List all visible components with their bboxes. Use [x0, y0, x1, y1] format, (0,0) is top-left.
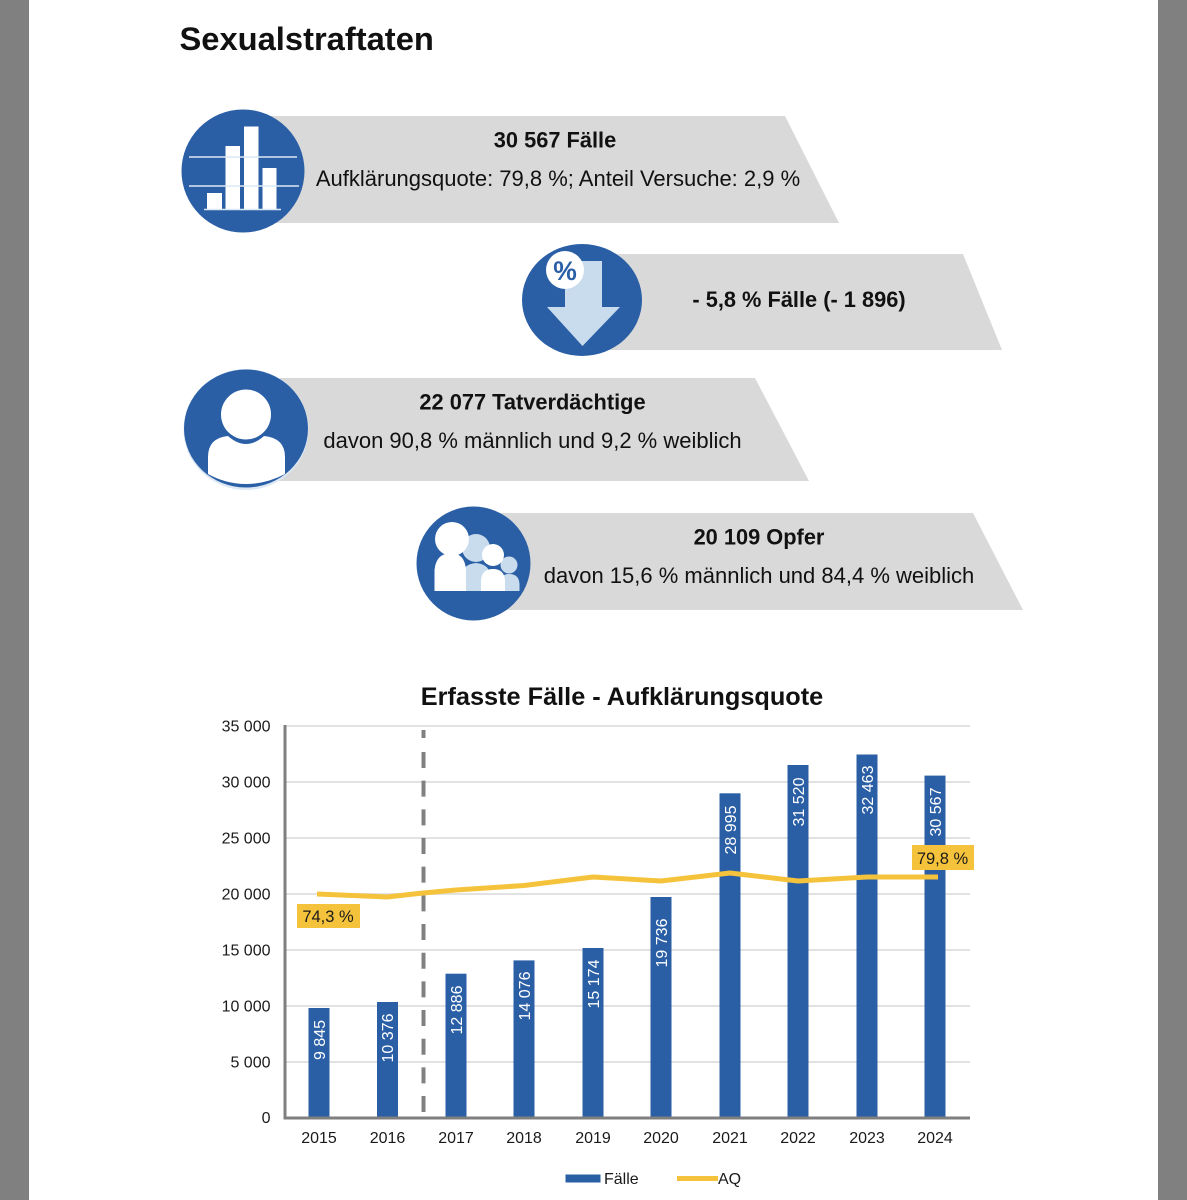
y axis labels	[222, 718, 271, 1127]
legend: AQ	[718, 1171, 741, 1188]
change text: - 5,8 % Fälle (- 1 896)	[692, 287, 906, 312]
x axis labels: 2023	[849, 1130, 885, 1147]
x axis labels	[301, 1130, 953, 1147]
x axis labels: 2018	[506, 1130, 542, 1147]
bar value labels: 15 174	[586, 959, 603, 1008]
label: 79,8 %	[912, 845, 974, 870]
x axis labels: 2020	[643, 1130, 679, 1147]
bar value labels: 32 463	[860, 765, 877, 814]
dashed separator	[422, 730, 426, 1112]
victims count: 20 109 Opfer	[694, 524, 825, 550]
bar value labels: 30 567	[928, 787, 945, 836]
panel: cases	[182, 110, 839, 232]
y axis labels: 10 000	[222, 998, 271, 1016]
x axis labels: 2021	[712, 1130, 748, 1147]
clearance rate line	[317, 873, 938, 897]
bar value labels: 28 995	[723, 805, 740, 854]
panel: victims	[416, 506, 1023, 620]
icon: group of people	[416, 506, 530, 620]
icon: bar chart	[182, 110, 304, 232]
y axis labels: 15 000	[222, 942, 271, 960]
x axis labels: 2024	[917, 1130, 953, 1147]
y axis labels: 5 000	[230, 1054, 271, 1072]
case count: 30 567 Fälle	[494, 128, 616, 152]
left page margin	[0, 0, 29, 1200]
chart title: Erfasste Fälle - Aufklärungsquote	[421, 683, 823, 711]
bar value labels: 12 886	[449, 985, 466, 1034]
y axis labels: 25 000	[222, 830, 271, 848]
x axis labels: 2022	[780, 1130, 816, 1147]
suspects count: 22 077 Tatverdächtige	[419, 390, 646, 414]
bars	[308, 754, 946, 1118]
clearance rate text: Aufklärungsquote: 79,8 %; Anteil Versuche: 2,9 %	[316, 166, 800, 191]
y axis labels: 30 000	[222, 774, 271, 792]
icon: person	[184, 369, 308, 490]
bar value labels: 9 845	[312, 1020, 329, 1060]
x axis labels: 2017	[438, 1130, 474, 1147]
axes	[285, 725, 970, 1118]
panel: suspects	[184, 369, 809, 490]
icon: percent down arrow: %	[553, 256, 577, 286]
label: 79,8 %: 79,8 %	[917, 850, 969, 868]
icon: percent down arrow	[522, 244, 642, 356]
y axis labels: 35 000	[222, 718, 271, 736]
bar value labels: 14 076	[517, 971, 534, 1020]
chart: cases and clearance rate	[222, 718, 974, 1147]
x axis labels: 2019	[575, 1130, 611, 1147]
label: 74,3 %: 74,3 %	[302, 908, 354, 926]
label: 74,3 %	[297, 904, 360, 928]
bar value labels: 10 376	[380, 1013, 397, 1062]
suspects gender text: davon 90,8 % männlich und 9,2 % weiblich	[323, 428, 742, 453]
legend	[566, 1171, 741, 1188]
y axis labels: 20 000	[222, 886, 271, 904]
bar value labels: 31 520	[791, 777, 808, 826]
bar value labels	[312, 765, 945, 1062]
x axis labels: 2015	[301, 1130, 337, 1147]
title: Sexualstraftaten	[180, 20, 434, 57]
right page margin	[1158, 0, 1187, 1200]
victims gender text: davon 15,6 % männlich und 84,4 % weiblich	[544, 563, 974, 588]
y axis labels: 0	[262, 1110, 271, 1127]
legend: Fälle	[604, 1171, 639, 1188]
bar value labels: 19 736	[654, 918, 671, 967]
x axis labels: 2016	[370, 1130, 405, 1147]
panel: change	[522, 244, 1002, 356]
